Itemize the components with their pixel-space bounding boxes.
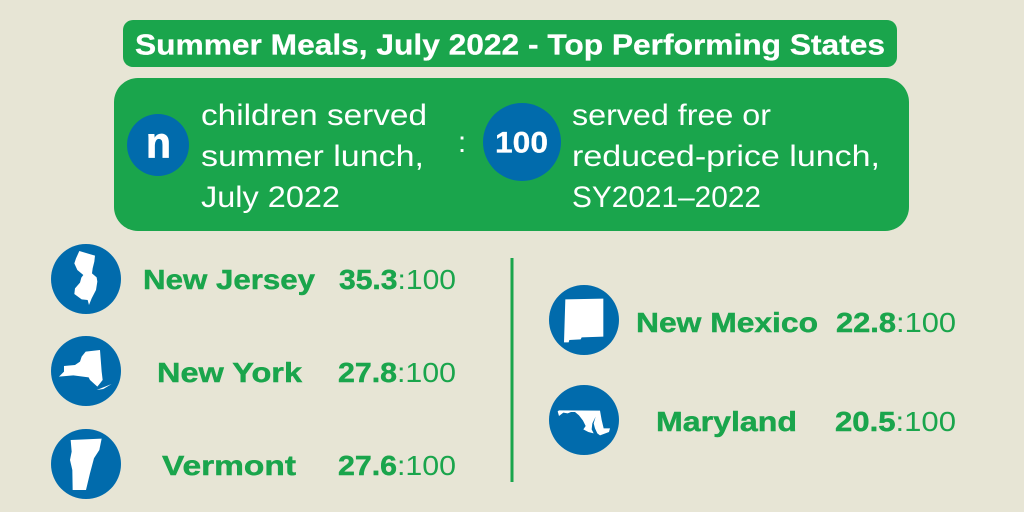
text: numerator description: summer lunch,: [201, 140, 424, 173]
icon: New Mexico: [549, 285, 619, 355]
row: New York: [51, 336, 456, 406]
icon: n circle: [127, 114, 189, 176]
icon: Maryland: [549, 385, 619, 455]
text: numerator description: children served: [201, 99, 427, 132]
row: New York: New York: [157, 357, 302, 388]
text: numerator description: [201, 99, 427, 214]
text: denominator description: served free or: [572, 99, 771, 132]
icon: 100 circle: [483, 103, 561, 181]
title: [123, 20, 897, 67]
divider: [510, 258, 514, 482]
icon: New Jersey: [51, 244, 121, 314]
row: New Mexico: [549, 285, 956, 355]
row: Maryland: 20.5:100: [835, 406, 956, 437]
row: Maryland: [549, 385, 956, 455]
row: New Mexico: 22.8:100: [836, 307, 956, 338]
text: denominator description: reduced-price lunch,: [572, 140, 880, 173]
row: Maryland: Maryland: [656, 406, 797, 437]
row: New Jersey: 35.3:100: [339, 264, 456, 295]
row: New Jersey: [51, 244, 456, 314]
icon: Vermont: [51, 429, 121, 499]
icon: n circle: n: [146, 118, 171, 168]
row: New Jersey: New Jersey: [143, 264, 315, 295]
row: Vermont: 27.6:100: [338, 450, 456, 481]
text: denominator description: SY2021–2022: [572, 181, 761, 214]
title: Summer Meals, July 2022 - Top Performing States: [135, 30, 885, 62]
row: Vermont: Vermont: [162, 450, 296, 481]
row: New Mexico: New Mexico: [636, 307, 818, 338]
icon: 100 circle: 100: [495, 126, 548, 160]
text: denominator description: [572, 99, 880, 214]
row: Vermont: [51, 429, 456, 499]
ratio colon: :: [458, 126, 466, 159]
row: New York: 27.8:100: [338, 357, 456, 388]
panel: ratio legend: [114, 78, 909, 231]
text: numerator description: July 2022: [201, 181, 340, 214]
icon: New York: [51, 336, 121, 406]
